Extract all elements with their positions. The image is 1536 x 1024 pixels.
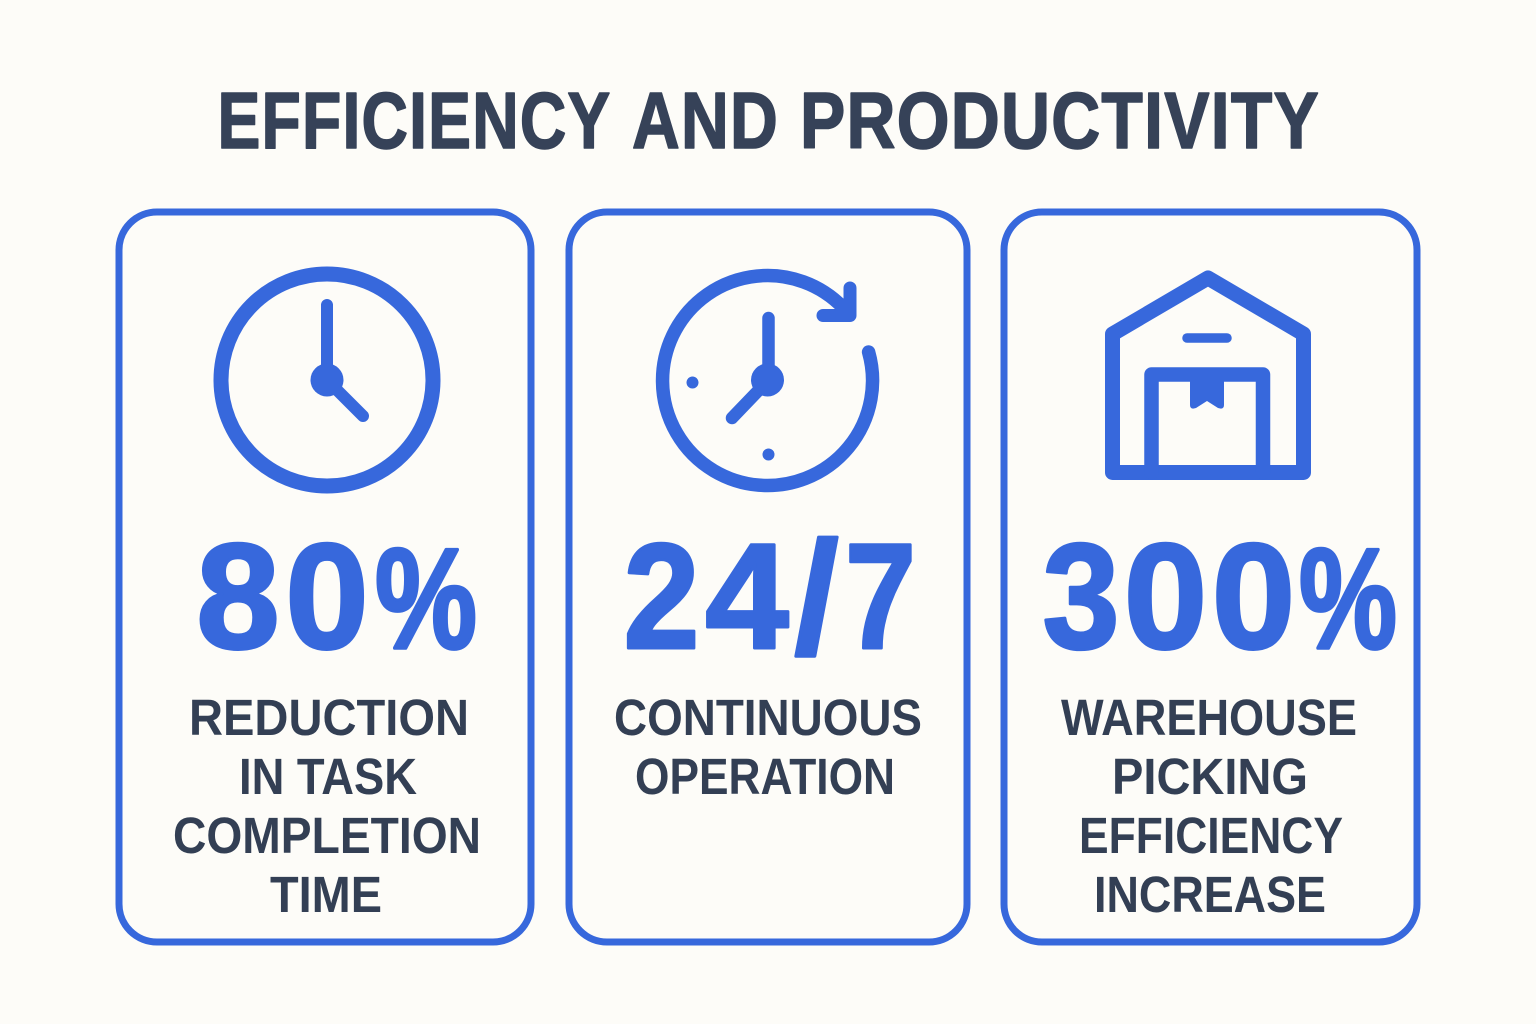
label: warehouse picking efficiency increase	[1061, 689, 1357, 923]
panel: continuous operation	[569, 212, 967, 942]
stat: 24/7: 7	[845, 512, 916, 680]
label: reduction in task completion time: REDUCTION	[189, 689, 469, 746]
label: warehouse picking efficiency increase: INCREASE	[1094, 866, 1326, 923]
label: continuous operation	[614, 689, 922, 805]
stat: 300%: 0	[1212, 512, 1295, 680]
icon: clock with circular arrow	[663, 276, 873, 486]
stat: 24/7: 4	[705, 512, 789, 680]
label: warehouse picking efficiency increase: EFFICIENCY	[1079, 807, 1343, 864]
panel: task completion	[119, 212, 531, 942]
label: warehouse picking efficiency increase: WAREHOUSE	[1061, 689, 1357, 746]
icon: warehouse	[1112, 278, 1304, 472]
stat: 80%: 8	[196, 512, 280, 680]
label: warehouse picking efficiency increase: PICKING	[1112, 748, 1308, 805]
label: reduction in task completion time: IN TASK	[239, 748, 417, 805]
label: continuous operation: CONTINUOUS	[614, 689, 922, 746]
stat: 80%	[196, 512, 477, 680]
label: reduction in task completion time	[173, 689, 481, 923]
title: EFFICIENCY	[218, 76, 612, 165]
stat: 24/7: 2	[624, 512, 700, 680]
icon: clock	[221, 274, 433, 486]
stat: 300%: 0	[1124, 512, 1207, 680]
stat: 300%: 3	[1042, 512, 1120, 680]
stat: 24/7	[624, 508, 916, 687]
stat: 300%	[1042, 512, 1397, 680]
stat: 80%: %	[375, 520, 477, 679]
label: reduction in task completion time: TIME	[270, 866, 382, 923]
panel: warehouse picking	[1004, 212, 1417, 942]
stat: 80%: 0	[285, 512, 369, 680]
label: reduction in task completion time: COMPLETION	[173, 807, 481, 864]
title: AND	[632, 76, 779, 165]
stat: 300%: %	[1299, 520, 1397, 679]
title	[218, 76, 1320, 165]
title: PRODUCTIVITY	[800, 76, 1320, 165]
stat: 24/7: /	[794, 508, 839, 687]
label: continuous operation: OPERATION	[635, 748, 895, 805]
